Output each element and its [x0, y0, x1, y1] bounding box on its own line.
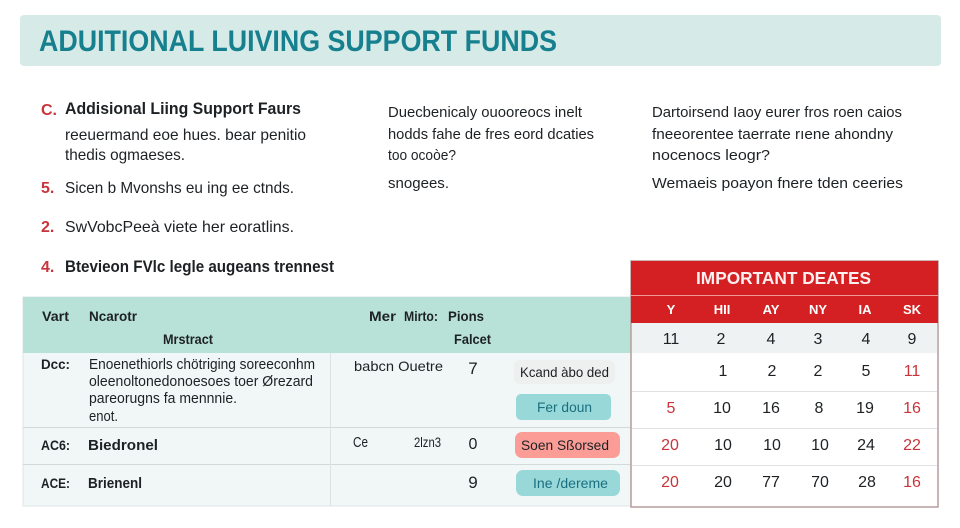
status pill [516, 470, 620, 496]
list item 2: Sicen b Mvonshs eu ing ee ctnds. [65, 180, 294, 197]
list item 3: SwVobcPeeà viete her eoratlins. [65, 219, 294, 236]
table header: Mrstract [163, 331, 213, 347]
calendar week 3: 20 [661, 437, 679, 454]
calendar grey row: 2 [717, 331, 726, 348]
numbered list [41, 99, 334, 276]
table row 1: Dcc: [41, 356, 70, 372]
table header: Ncarotr [89, 308, 138, 324]
list item 4: 4. [41, 259, 54, 276]
text block: right column: Dartoirsend Iaoy eurer fros roen caios [652, 104, 902, 121]
calendar week 1: 11 [904, 363, 920, 380]
text block: right column [652, 104, 903, 192]
table header: Falcet [454, 331, 491, 347]
calendar grey row: 3 [814, 331, 823, 348]
table row 1: enot. [89, 408, 118, 425]
table row 3 [41, 470, 620, 496]
table header: Mirto: [404, 308, 438, 324]
table row 1: Enoenethiorls chötriging soreeconhm [89, 356, 315, 373]
list item 1: C. [41, 102, 57, 119]
table row 1: 7 [468, 359, 478, 378]
calendar weekday labels [667, 302, 922, 317]
table header: Pions [448, 308, 484, 324]
calendar grey row [632, 323, 937, 353]
status pill [515, 432, 620, 458]
table [23, 297, 633, 506]
calendar week 2: 5 [667, 400, 676, 417]
text block: middle column: hodds fahe de fres eord dcaties [388, 126, 594, 143]
list item 4: Btevieon FVlc legle augeans trennest [65, 257, 334, 276]
table row 3: ACE: [41, 475, 70, 491]
list item 1 [41, 99, 306, 164]
calendar week 4: 16 [903, 474, 921, 491]
table row 2: 0 [469, 436, 478, 453]
calendar week 3: 10 [763, 437, 781, 454]
status pill [516, 394, 611, 420]
calendar weekday labels: AY [763, 302, 780, 317]
text block: right column: nocenocs leogr? [652, 147, 770, 164]
text block: middle column [388, 104, 594, 192]
table row 1: oleenoltonedonoesoes toer Ørezard [89, 373, 313, 390]
status pill: Soen Sßorsed [521, 437, 609, 453]
calendar weekday labels: SK [903, 302, 922, 317]
calendar week 4: 20 [714, 474, 732, 491]
table row 2 [41, 432, 620, 458]
calendar week 2: 8 [815, 400, 824, 417]
calendar week 1: 2 [814, 363, 823, 380]
text block: middle column: Duecbenicaly ouooreocs inelt [388, 104, 583, 121]
table row 1: babcn Ouetre [354, 358, 443, 374]
list item 1: thedis ogmaeses. [65, 147, 185, 164]
calendar week 1: 1 [719, 363, 728, 380]
table header: Mer [369, 308, 397, 324]
calendar week 3: 10 [714, 437, 732, 454]
calendar week 4: 70 [811, 474, 829, 491]
calendar week 4 [661, 474, 921, 491]
calendar week 4: 20 [661, 474, 679, 491]
calendar week 3: 24 [857, 437, 875, 454]
calendar week 4: 28 [858, 474, 876, 491]
text block: middle column: too ocoòe? [388, 147, 456, 164]
text block: right column: Wemaeis poayon fnere tden ceeries [652, 175, 903, 192]
calendar grey row: 9 [908, 331, 917, 348]
calendar week 4: 77 [762, 474, 780, 491]
calendar grey row: 11 [663, 331, 679, 348]
list item 1: Addisional Liing Support Faurs [65, 99, 301, 118]
status pill [514, 360, 615, 384]
list item 2: 5. [41, 180, 54, 197]
status pill: Fer doun [537, 399, 592, 415]
table row 3: 9 [468, 473, 478, 492]
status pill: Ine /dereme [533, 475, 608, 491]
title banner [20, 15, 941, 66]
calendar heading: IMPORTANT DEATES [696, 268, 871, 288]
calendar weekday labels: HII [714, 302, 730, 317]
table row 2: 2lzn3 [414, 434, 441, 450]
list item 3: 2. [41, 219, 54, 236]
calendar grey row: 4 [767, 331, 776, 348]
calendar grey row: 4 [862, 331, 871, 348]
calendar week 3: 22 [903, 437, 921, 454]
table row 3: Brienenl [88, 475, 142, 492]
table row 2: Ce [353, 434, 368, 451]
calendar week 2: 10 [713, 400, 731, 417]
text block: middle column: snogees. [388, 175, 449, 192]
table header: Vart [42, 308, 69, 324]
calendar: important dates [631, 261, 938, 507]
table row 2: AC6: [41, 437, 70, 453]
calendar weekday labels: Y [667, 302, 676, 317]
status pill: Kcand àbo ded [520, 364, 609, 380]
calendar weekday labels: NY [809, 302, 827, 317]
list item 1: reeuermand eoe hues. bear penitio [65, 127, 306, 144]
calendar heading [631, 261, 938, 323]
table row 2: Biedronel [88, 437, 158, 454]
calendar week 2: 16 [903, 400, 921, 417]
calendar week 1 [719, 363, 920, 380]
text block: right column: fneeorentee taerrate rıene ahondny [652, 126, 894, 143]
calendar week 2: 19 [856, 400, 874, 417]
table row 1 [41, 356, 615, 425]
calendar weekday labels: IA [858, 302, 872, 317]
calendar week 2 [667, 400, 921, 417]
calendar week 3 [661, 437, 921, 454]
calendar week 1: 2 [768, 363, 777, 380]
calendar week 2: 16 [762, 400, 780, 417]
table row 1: pareorugns fa mennnie. [89, 390, 237, 407]
table header [23, 297, 633, 353]
calendar week 1: 5 [862, 363, 871, 380]
title: ADUITIONAL LUIVING SUPPORT FUNDS [39, 25, 557, 58]
calendar week 3: 10 [811, 437, 829, 454]
